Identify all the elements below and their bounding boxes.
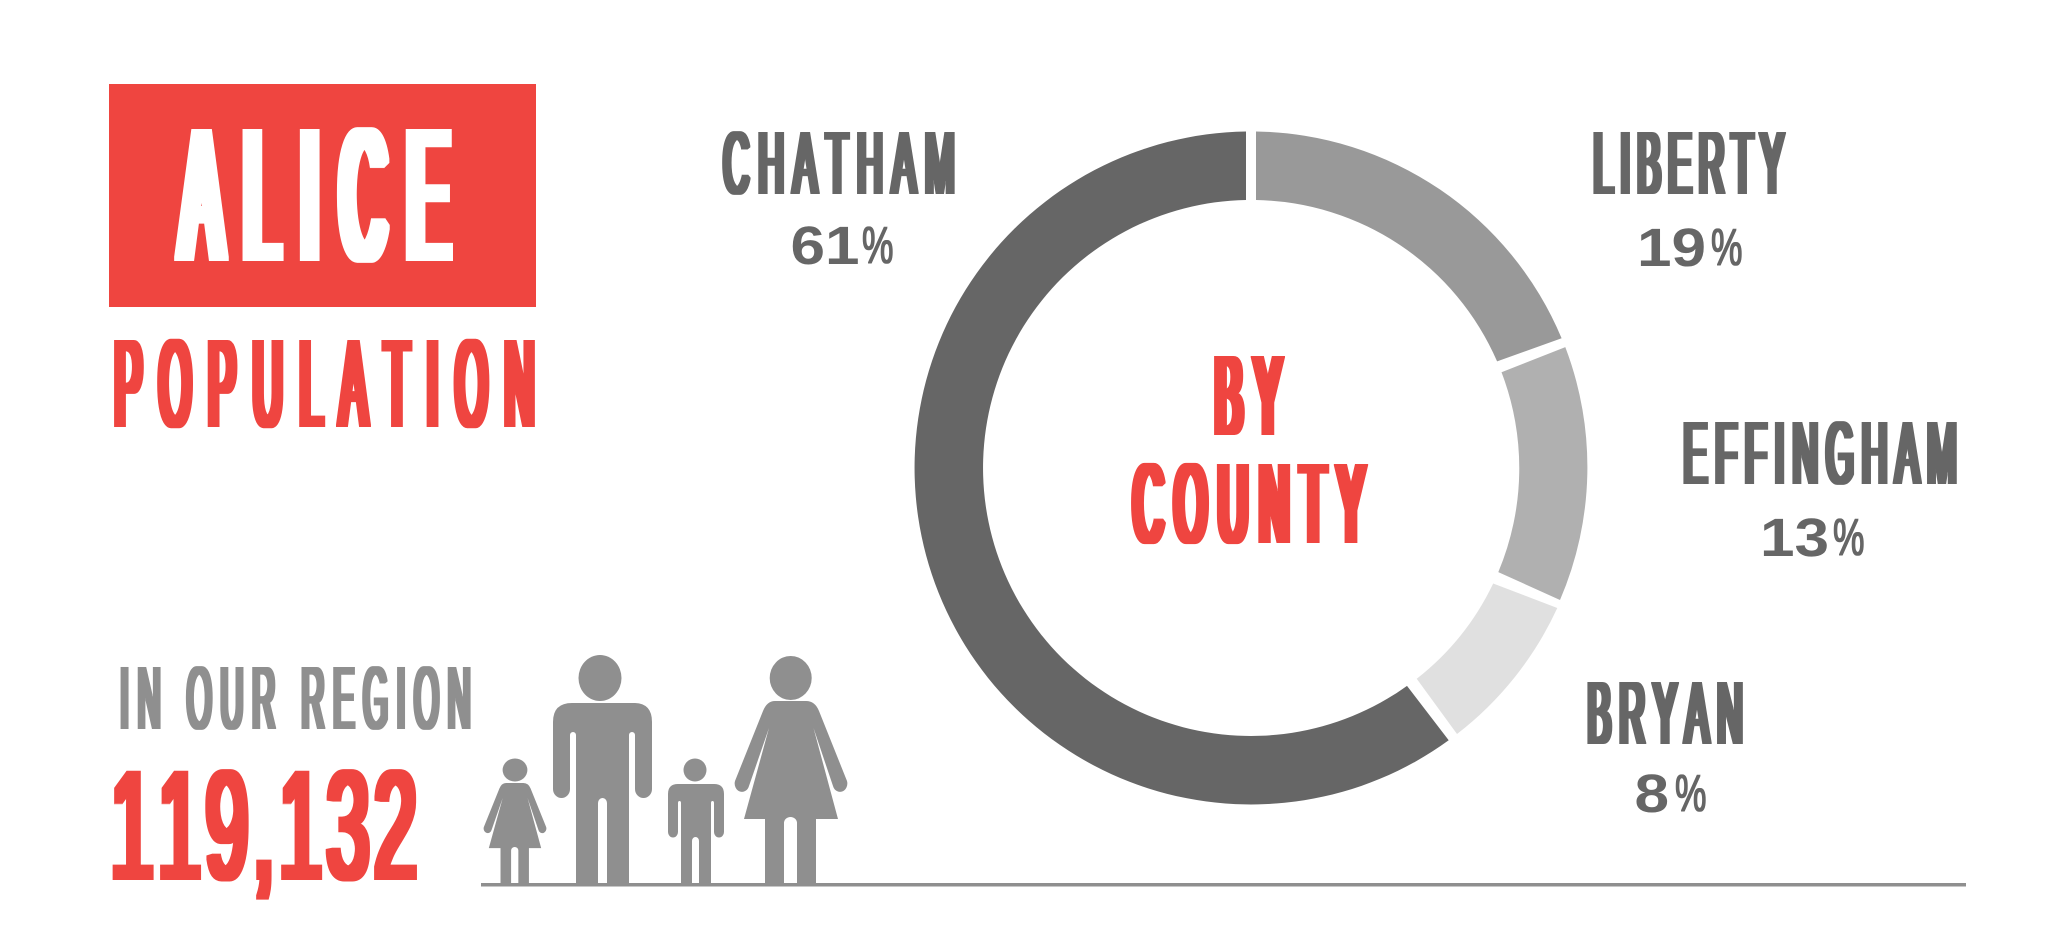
label: Effingham 13%: EFFINGHAM [1684, 404, 1957, 502]
centre label: BY COUNTY: BY [1215, 332, 1281, 460]
label: Chatham 61%: CHATHAM [723, 114, 955, 212]
donut chart: population by county [915, 132, 1587, 804]
title badge: ALICE: ALICE [181, 92, 449, 299]
label: Effingham 13% [1684, 404, 1957, 568]
subtitle: POPULATION: POPULATION [115, 315, 534, 453]
segment: Liberty 19% [1256, 132, 1562, 361]
icon: woman [735, 656, 847, 884]
label: Liberty 19%: % [1711, 219, 1742, 277]
label: Effingham 13%: % [1833, 509, 1864, 567]
icon: boy [668, 758, 724, 884]
label: Chatham 61% [723, 114, 955, 276]
segment: Bryan 8% [1417, 584, 1557, 734]
number: 119,132: 119,132 [111, 740, 417, 911]
region total block [111, 648, 471, 911]
label: Bryan 8%: 8 [1634, 764, 1669, 824]
label: Liberty 19% [1594, 114, 1784, 278]
heading: ALICE population [109, 84, 536, 453]
title badge: ALICE [109, 84, 536, 307]
centre label: BY COUNTY [1134, 332, 1365, 568]
label: Bryan 8%: BRYAN [1588, 664, 1743, 762]
label: Chatham 61%: % [862, 217, 893, 275]
label: Effingham 13%: 13 [1760, 508, 1829, 568]
icon: man [553, 655, 652, 884]
segment: Effingham 13% [1498, 347, 1587, 600]
label: in our region: IN OUR REGION [120, 648, 471, 748]
icon: family of four on a ground line [481, 655, 1966, 886]
centre label: BY COUNTY: COUNTY [1134, 440, 1365, 568]
label: Liberty 19%: 19 [1637, 218, 1706, 278]
label: Bryan 8%: % [1675, 765, 1706, 823]
label: Bryan 8% [1588, 664, 1743, 824]
label: Liberty 19%: LIBERTY [1594, 114, 1784, 212]
segment: Chatham 61% [915, 132, 1449, 804]
ground line [481, 883, 1966, 886]
label: Chatham 61%: 61 [790, 216, 860, 276]
icon: girl [484, 758, 546, 884]
